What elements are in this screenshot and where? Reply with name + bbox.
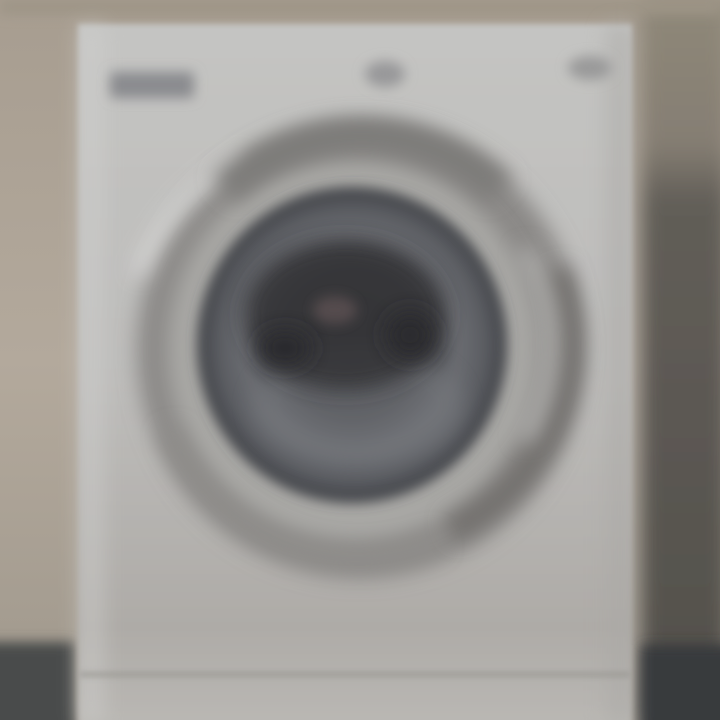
door ring bbox=[137, 122, 583, 578]
control panel bbox=[110, 56, 612, 98]
door glass bbox=[197, 187, 507, 503]
machine body bbox=[78, 24, 634, 720]
floor shadows bbox=[0, 642, 720, 720]
